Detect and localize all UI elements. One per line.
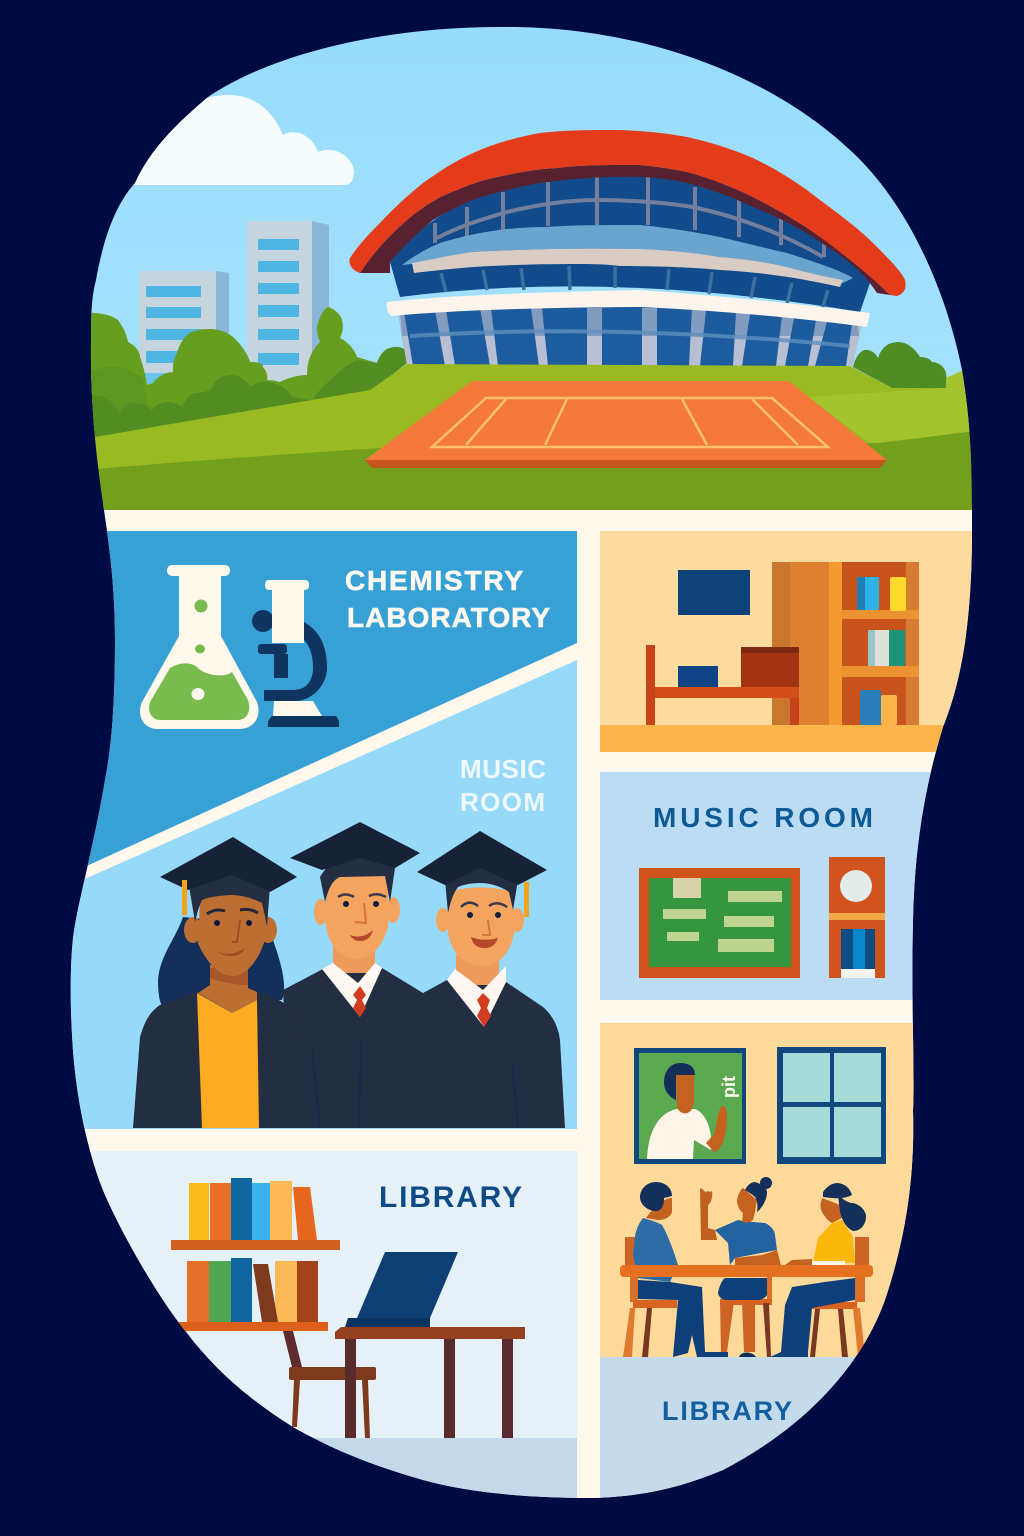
- window grid: [435, 177, 824, 257]
- person one: seated left: [633, 1182, 728, 1357]
- facade rail: [410, 331, 850, 346]
- facade shade above rail: [400, 308, 859, 336]
- heading: music room: MUSIC: [460, 754, 546, 784]
- icon: wall art: [678, 570, 750, 615]
- chairs: [623, 1237, 869, 1357]
- lower glass facade: [398, 304, 862, 366]
- icon: bed: [646, 645, 799, 725]
- graduate: left: [133, 837, 297, 1128]
- icon: bookcase: [772, 562, 919, 725]
- heading: chemistry laboratory: [346, 570, 550, 628]
- person three: seated right: [770, 1183, 866, 1357]
- window mullions lower: [441, 266, 828, 310]
- building: rear tower: [139, 271, 229, 387]
- panel: campus scene: [60, 10, 990, 510]
- trees left mid tone: [91, 366, 148, 428]
- canopy: [402, 225, 853, 283]
- icon: framed teacher: [634, 1048, 746, 1164]
- group at table: [620, 1177, 873, 1357]
- heading: music room: [462, 760, 546, 812]
- heading: music room: ROOM: [460, 787, 545, 817]
- red roof: [349, 130, 906, 296]
- heading: chemistry laboratory: LABORATORY: [347, 602, 550, 633]
- person two: seated centre: [700, 1177, 781, 1357]
- graduate: middle: [283, 822, 423, 1128]
- stadium: [349, 130, 906, 366]
- icon: notice board: [639, 868, 800, 978]
- tennis court: [365, 381, 887, 468]
- beige band: [412, 249, 843, 287]
- lawn back: [95, 364, 972, 470]
- icon: flask: [140, 565, 258, 729]
- icon: microscope: [252, 580, 339, 727]
- icon: chair: [253, 1264, 376, 1438]
- icon: framed teacher: pit: [719, 1076, 739, 1098]
- table top: [620, 1265, 873, 1277]
- sky: [60, 10, 990, 430]
- panel: classroom: [600, 1023, 980, 1507]
- panel: music room: [600, 772, 980, 1000]
- icon: laptop: [345, 1252, 458, 1327]
- gutter between columns: [577, 512, 600, 1512]
- icon: bookshelf: [171, 1178, 340, 1331]
- heading: library: LIBRARY: [662, 1396, 792, 1426]
- maroon roof underside: [360, 165, 890, 295]
- icon: speaker cabinet: [829, 857, 885, 978]
- panel: chemistry laboratory: [80, 531, 577, 869]
- icon: window: [777, 1047, 886, 1164]
- panel: graduates: [60, 660, 577, 1129]
- heading: music room: MUSIC ROOM: [653, 802, 873, 833]
- white band: [387, 290, 870, 327]
- trees left darker: [85, 347, 407, 440]
- panel: dorm room: [600, 531, 980, 752]
- facade columns: [398, 308, 862, 366]
- lawn front: [95, 431, 975, 510]
- cream base: [50, 505, 1000, 1515]
- panel: library left: [60, 1151, 577, 1508]
- heading: library: LIBRARY: [379, 1181, 522, 1214]
- icon: desk: [335, 1327, 525, 1438]
- heading: chemistry laboratory: CHEMISTRY: [345, 565, 523, 596]
- building: tall tower: [247, 221, 329, 381]
- trees right: [853, 342, 948, 388]
- graduate: right: [417, 831, 565, 1128]
- upper glass: [390, 172, 870, 312]
- trees left: [85, 307, 407, 440]
- icon: cloud: [120, 95, 354, 185]
- court lines: [432, 398, 828, 447]
- lawn right highlight: [808, 368, 975, 443]
